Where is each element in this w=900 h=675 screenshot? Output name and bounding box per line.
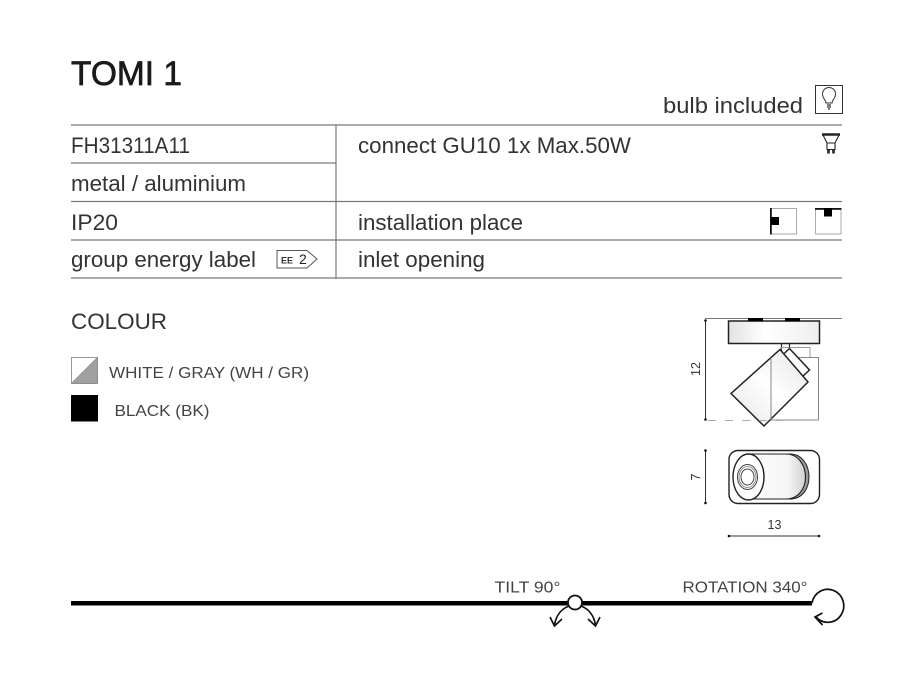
swatch: white / gray [72, 358, 98, 384]
bottom rail [71, 601, 812, 606]
spec: installation place: installation place [358, 210, 523, 235]
front view technical drawing [689, 449, 820, 537]
spec: IP rating: IP20 [71, 210, 118, 235]
spec table [71, 125, 842, 278]
spec: material: metal / aluminium [71, 171, 246, 196]
side view technical drawing [689, 318, 842, 426]
icon: GU10 socket [822, 134, 840, 154]
colour label: black: BLACK (BK) [114, 403, 210, 420]
spec: energy label: group energy label [71, 247, 256, 272]
icon: tilt arrows [550, 596, 600, 626]
icon: energy label tag [277, 250, 317, 268]
spec: inlet opening: inlet opening [358, 247, 485, 272]
dimension: 7: 7 [689, 473, 703, 480]
title: TOMI 1 [71, 55, 182, 93]
bulb included label: bulb included [663, 93, 803, 118]
swatch: black [71, 395, 98, 422]
icon: wall installation [770, 208, 796, 234]
icon: energy label tag: EE [281, 256, 293, 266]
icon: bulb [816, 86, 842, 114]
spec: connection: connect GU10 1x Max.50W [358, 133, 632, 158]
dimension: 12: 12 [689, 362, 703, 376]
icon: rotation arrow [812, 589, 844, 625]
tilt label: TILT 90° [494, 580, 560, 596]
rotation label: ROTATION 340° [682, 580, 808, 596]
icon: ceiling installation [815, 208, 842, 234]
colour heading: COLOUR [71, 309, 167, 334]
colour label: white / gray: WHITE / GRAY (WH / GR) [109, 365, 309, 382]
dimension: 13: 13 [768, 518, 781, 532]
icon: energy label tag: 2 [299, 251, 307, 267]
spec: product code: FH31311A11 [71, 133, 190, 158]
